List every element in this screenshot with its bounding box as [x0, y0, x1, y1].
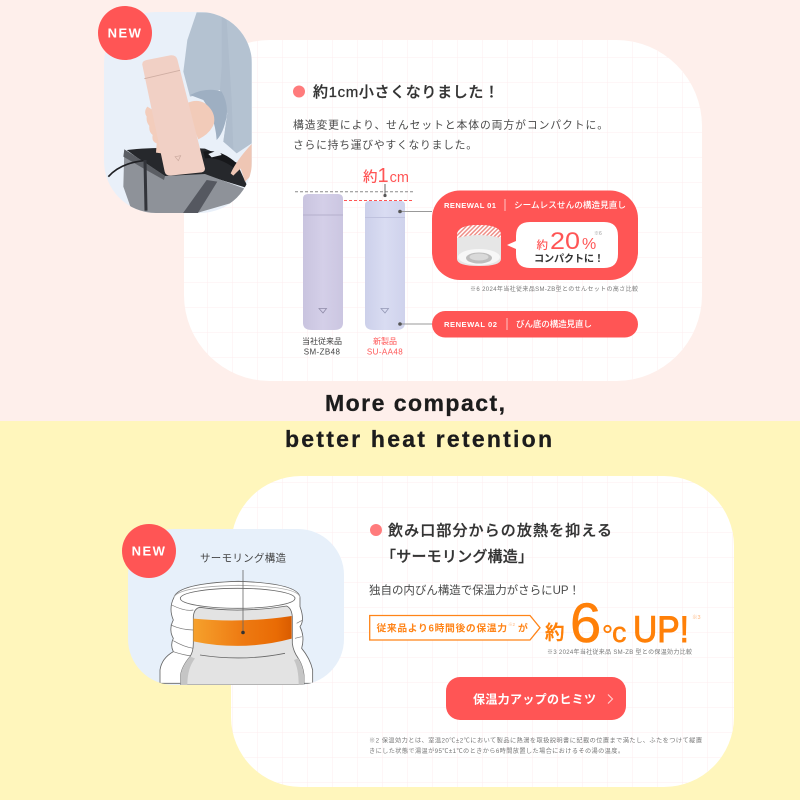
callout: renewal 01: RENEWAL 01 — [444, 201, 497, 210]
bottle: previous model — [303, 194, 343, 330]
text block: inner bottle: 独自の内びん構造で保温力がさらにUP！ — [369, 583, 580, 597]
arrow label: six hours later — [370, 616, 540, 640]
bubble: 20 percent compact: 20 — [550, 228, 580, 255]
big number: about 6 degrees up: UP! — [633, 609, 689, 650]
label: previous model — [302, 336, 342, 356]
title: better heat retention — [285, 426, 552, 452]
connector: renewal 02 — [398, 322, 432, 326]
badge: NEW top — [98, 6, 152, 60]
heading: thermo ring — [370, 522, 612, 566]
footnote: heat retention definition — [369, 736, 702, 755]
heading: compact: 約1cm小さくなりました！ — [313, 84, 499, 101]
callout: renewal 02: びん底の構造見直し — [516, 318, 592, 329]
big number: about 6 degrees up: 6 — [570, 591, 601, 654]
text block: compact description: さらに持ち運びやすくなりました。 — [293, 138, 477, 152]
bubble: 20 percent compact: % — [582, 236, 596, 253]
footnote: heat retention definition: ※2 保温効力とは、室温20℃±2℃において製品に熱湯を取扱説明書に記載の位置まで満たし、ふたをつけて縦置 — [369, 736, 702, 744]
label: new model — [367, 336, 403, 356]
footnote: heat retention comparison: ※3 2024年当社従来品 SM-ZB 型との保温効力比較 — [547, 648, 692, 656]
label: new model: SU-AA48 — [367, 348, 403, 356]
badge: NEW bottom — [122, 524, 176, 578]
illustration: thermo ring structure — [128, 529, 344, 685]
callout: renewal 01: シームレスせんの構造見直し — [514, 199, 626, 210]
connector: renewal 01 — [398, 210, 432, 213]
big number: about 6 degrees up — [545, 591, 701, 654]
label: new model: 新製品 — [373, 336, 397, 346]
text block: compact description: 構造変更により、せんセットと本体の両方がコンパクトに。 — [293, 118, 608, 132]
measurement lines — [295, 184, 413, 200]
big number: about 6 degrees up: ※3 — [692, 614, 701, 621]
bottle: new model — [365, 201, 405, 330]
arrow label: six hours later: ※2 — [508, 622, 515, 627]
footnote: renewal 01: ※6 2024年当社従来品SM-ZB型とのせんセットの高さ比較 — [470, 285, 638, 293]
panel: heat retention — [231, 476, 734, 787]
bubble: 20 percent compact — [507, 222, 618, 268]
badge: NEW bottom: NEW — [132, 544, 166, 558]
label: thermo ring: サーモリング構造 — [200, 552, 286, 564]
icon: stopper cap — [457, 225, 501, 266]
callout: renewal 01 — [432, 190, 638, 280]
callout: renewal 02: RENEWAL 02 — [444, 320, 497, 329]
heading: thermo ring: 「サーモリング構造」 — [381, 548, 533, 566]
footnote: heat retention definition: きにした状態で湯温が95℃±1℃のときから6時間放置した場合におけるその湯の温度。 — [369, 747, 624, 755]
button: secret of heat retention: 保温力アップのヒミツ — [473, 692, 596, 706]
label: previous model: SM-ZB48 — [304, 348, 340, 356]
background: yellow lower band — [0, 421, 800, 800]
photo: hand putting bottle into bag — [104, 12, 252, 215]
text block: compact description — [293, 118, 608, 152]
bubble: 20 percent compact: ※6 — [594, 231, 602, 237]
background: pink upper band — [0, 0, 800, 421]
title — [285, 390, 552, 452]
button: secret of heat retention — [446, 677, 626, 720]
badge: NEW top: NEW — [108, 26, 142, 40]
title: More compact, — [325, 390, 505, 416]
label: previous model: 当社従来品 — [302, 336, 342, 346]
panel: compact size — [184, 40, 702, 381]
big number: about 6 degrees up: 約 — [545, 622, 565, 644]
bubble: 20 percent compact: コンパクトに！ — [534, 253, 604, 265]
heading: thermo ring: 飲み口部分からの放熱を抑える — [388, 522, 612, 540]
label: about 1cm: 約1cm — [363, 165, 409, 187]
arrow label: six hours later: 従来品より6時間後の保温力 — [376, 622, 507, 634]
callout: renewal 02 — [432, 311, 638, 338]
bubble: 20 percent compact: 約 — [536, 238, 548, 252]
big number: about 6 degrees up: c — [612, 617, 626, 649]
arrow label: six hours later: が — [518, 622, 528, 634]
